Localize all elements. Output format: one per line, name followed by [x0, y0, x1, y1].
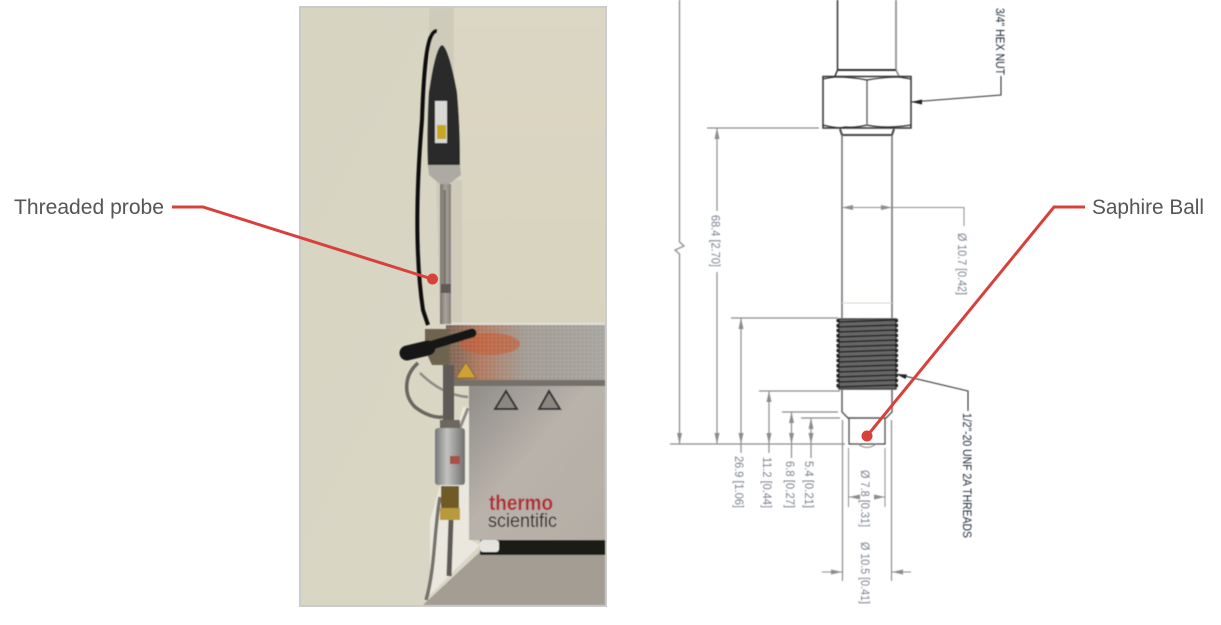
callout: thread specification	[896, 374, 972, 538]
dimension: 11.2: 11.2 [0.44]	[760, 457, 772, 508]
table surface	[423, 550, 605, 605]
upper tube	[835, 0, 838, 76]
callout: thread specification: 1/2"-20 UNF 2A THREADS	[960, 413, 972, 538]
leader line	[867, 207, 1085, 436]
photo background wall	[300, 7, 606, 606]
photo contents: scientific	[488, 511, 557, 532]
threaded section	[837, 319, 897, 389]
brand text: thermo	[489, 492, 553, 515]
hot plate top	[446, 323, 605, 386]
overall length dimension line with break	[675, 0, 684, 444]
probe rod	[440, 184, 451, 324]
leader line	[172, 207, 432, 279]
dimension: diameter 10.5	[822, 420, 911, 604]
dimension: 5.4: 5.4 [0.21]	[802, 461, 814, 508]
warning triangles	[456, 362, 476, 378]
sapphire ball arc	[858, 444, 876, 448]
callout: Threaded probe	[14, 196, 438, 284]
callout: Saphire Ball	[862, 196, 1204, 442]
dimension: 6.8: 6.8 [0.27]	[783, 461, 795, 508]
label: Threaded probe: Threaded probe	[14, 196, 164, 219]
photo contents	[406, 8, 605, 605]
dimension: diameter 7.8	[848, 448, 885, 527]
neck and probe shaft	[840, 129, 894, 135]
panel: photo of probe mounted on instrument	[300, 7, 606, 606]
dimension: diameter 10.7: Ø 10.7 [0.42]	[955, 233, 967, 295]
dimension: 6.8	[782, 412, 838, 508]
dimension: diameter 10.7	[842, 205, 967, 295]
arrows on baseline	[677, 433, 814, 444]
white wall panel beside instrument	[430, 407, 480, 595]
dimension: 68.4: 68.4 [2.70]	[708, 215, 720, 267]
leader dot	[862, 430, 872, 442]
baseline	[670, 443, 845, 445]
dimension: 11.2	[759, 391, 840, 508]
dimension: 68.4	[707, 128, 819, 444]
callout: 3/4 inch hex nut: 3/4" HEX NUT	[993, 8, 1005, 75]
probe handle	[428, 45, 460, 165]
dimension: diameter 7.8: Ø 7.8 [0.31]	[858, 470, 870, 527]
probe lower body and tip	[842, 390, 892, 418]
mounting bracket and knob	[425, 329, 449, 365]
leader dot	[427, 274, 438, 284]
lower rod and sensor	[443, 365, 454, 420]
dimension: 5.4	[801, 418, 840, 508]
dimension: 26.9: 26.9 [1.06]	[732, 456, 744, 508]
instrument body	[469, 384, 605, 540]
label: Saphire Ball: Saphire Ball	[1092, 196, 1204, 219]
cable	[417, 31, 437, 325]
gold connector	[441, 486, 459, 520]
callout: 3/4 inch hex nut	[911, 8, 1005, 104]
hex nut	[823, 76, 911, 128]
dimension: diameter 10.5: Ø 10.5 [0.41]	[858, 542, 870, 604]
panel: dimensional drawing	[670, 0, 1005, 604]
flexible steel hoses	[407, 363, 443, 417]
dimension: 26.9	[731, 318, 838, 508]
